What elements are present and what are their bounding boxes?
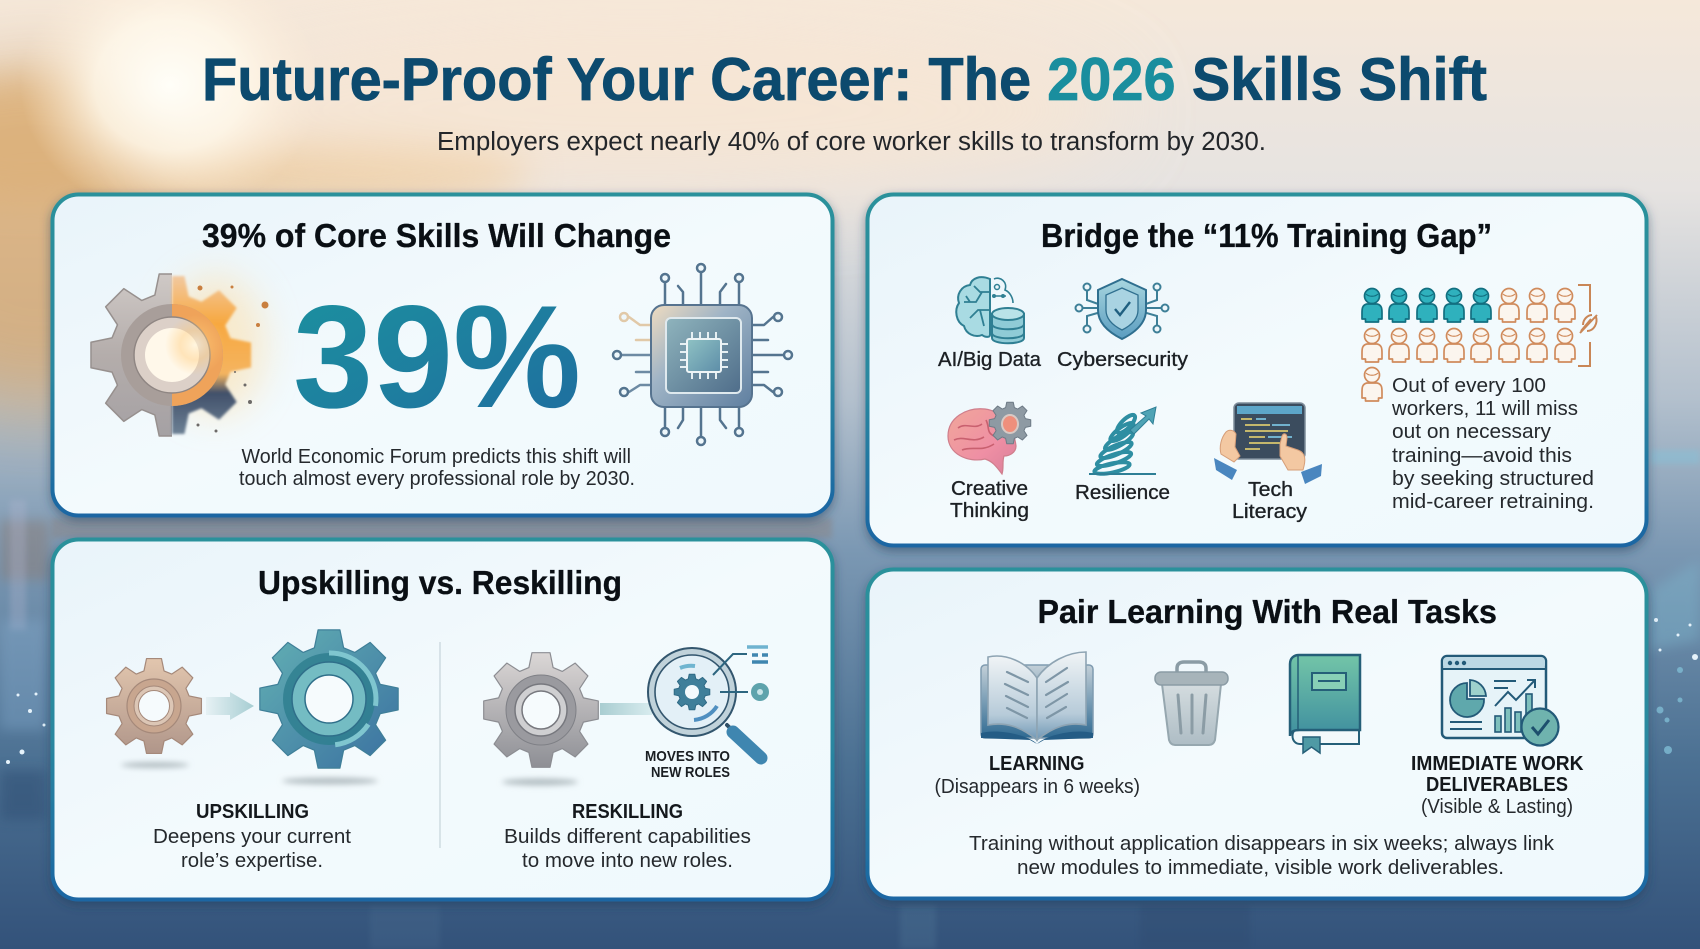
label: learning: (Disappears in 6 weeks) [934,775,1140,798]
skill: Cybersecurity [1057,279,1188,371]
training gap description: by seeking structured [1392,467,1594,490]
description text: Training without application disappears in six weeks; always link [969,832,1555,855]
icon: small gear growing into large gear [107,630,398,784]
icon: trash can [1155,662,1228,745]
panel: bridge the training gap [868,194,1646,546]
skill: Resilience: Resilience [1075,482,1170,504]
pictogram: 11 of 100 workers [1362,285,1597,401]
description text [239,445,635,490]
icon: microchip [613,264,792,445]
training gap description: workers, 11 will miss [1391,397,1578,420]
training gap description: out on necessary [1392,420,1552,443]
icon: open book [981,652,1093,744]
training gap description: mid-career retraining. [1392,490,1594,513]
title: Future-Proof Your Career: The 2026 Skills Shift [202,46,1487,113]
skill: AI/Big Data [938,277,1042,371]
label: learning: LEARNING [989,753,1084,775]
description text [969,832,1555,879]
label: moves into new roles [645,748,730,781]
description text: new modules to immediate, visible work deliverables. [1017,856,1504,879]
label: learning [934,753,1140,798]
icon: gray gear moving to magnifier [484,647,769,786]
description text: touch almost every professional role by 2030. [239,467,635,490]
label: moves into new roles: MOVES INTO [645,748,730,765]
divider [439,642,441,848]
text: upskilling: role’s expertise. [181,849,323,872]
text: upskilling: UPSKILLING [196,801,309,823]
subtitle: Employers expect nearly 40% of core worker skills to transform by 2030. [437,128,1266,156]
skill: Tech Literacy: Literacy [1232,501,1307,523]
label: moves into new roles: NEW ROLES [651,764,730,781]
skill: Tech Literacy: Tech [1248,479,1293,501]
skill: Resilience [1075,407,1170,504]
icon: closed book [1290,655,1360,753]
skill: Cybersecurity: Cybersecurity [1057,349,1188,371]
panel: pair learning with real tasks [868,570,1646,898]
skill: Creative Thinking: Creative [951,478,1028,500]
label: immediate work deliverables: (Visible & Lasting) [1421,795,1573,818]
panel: upskilling vs reskilling [52,540,832,900]
text: reskilling: Builds different capabilities [504,825,751,848]
heading: core skills: 39% of Core Skills Will Change [202,217,671,254]
skill: Creative Thinking [948,402,1031,522]
description text: World Economic Forum predicts this shift will [242,445,631,468]
text: reskilling [504,801,751,872]
label: immediate work deliverables: DELIVERABLES [1426,774,1568,796]
skill: AI/Big Data: AI/Big Data [938,349,1042,371]
heading: pair learning: Pair Learning With Real Tasks [1038,593,1497,630]
skill: Creative Thinking: Thinking [950,500,1029,522]
big 39% figure: 39% [293,275,581,438]
heading: training gap: Bridge the “11% Training Gap” [1041,217,1492,254]
text: upskilling: Deepens your current [153,825,351,848]
training gap description [1391,374,1594,513]
icon: gear breaking apart [91,274,268,436]
text: reskilling: to move into new roles. [522,849,733,872]
icon: work deliverables dashboard [1442,656,1558,746]
skill: Tech Literacy [1214,403,1322,523]
text: upskilling [153,801,351,872]
text: reskilling: RESKILLING [572,801,683,823]
label: immediate work deliverables: IMMEDIATE WORK [1411,753,1584,775]
heading: upskilling vs reskilling: Upskilling vs. Reskilling [258,564,622,601]
training gap description: training—avoid this [1392,444,1572,467]
panel: 39% of core skills will change [52,194,832,516]
training gap description: Out of every 100 [1392,374,1546,397]
label: immediate work deliverables [1411,753,1584,818]
